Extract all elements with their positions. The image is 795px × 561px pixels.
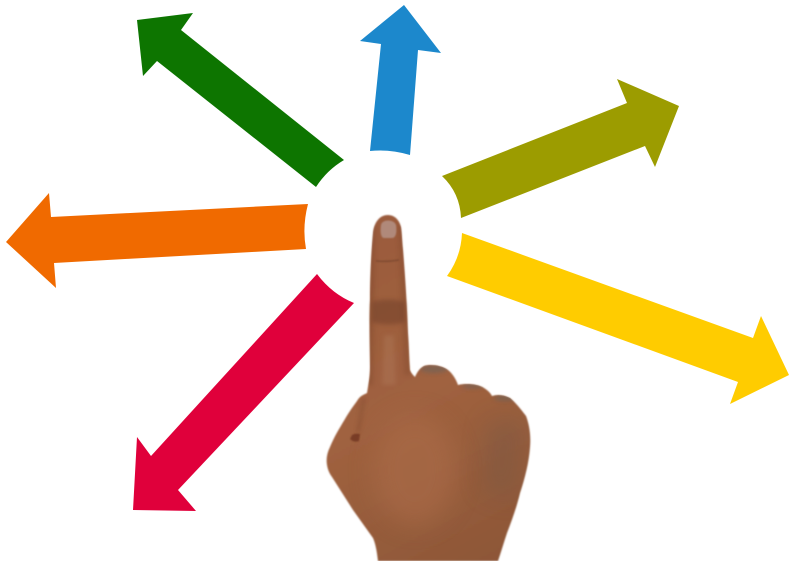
arrow: orange, left	[6, 193, 308, 288]
thumb crease	[350, 434, 360, 442]
arrow: olive, upper right	[442, 79, 679, 218]
hand with pointing index finger	[327, 215, 530, 561]
arrow: red, lower left	[133, 274, 354, 511]
arrow: blue, up	[360, 5, 441, 155]
hand highlight	[384, 434, 450, 518]
arrow: green, upper left	[137, 13, 344, 187]
knuckles	[420, 365, 516, 401]
back-of-hand tendon shading	[486, 422, 524, 490]
hand silhouette	[327, 215, 530, 561]
arrow: yellow, lower right	[447, 233, 789, 404]
finger crease: lower joint	[372, 300, 405, 324]
finger crease: upper joint	[376, 260, 399, 261]
thumb edge	[358, 398, 364, 432]
fingernail	[381, 220, 396, 238]
finger shading and highlight	[366, 225, 411, 385]
